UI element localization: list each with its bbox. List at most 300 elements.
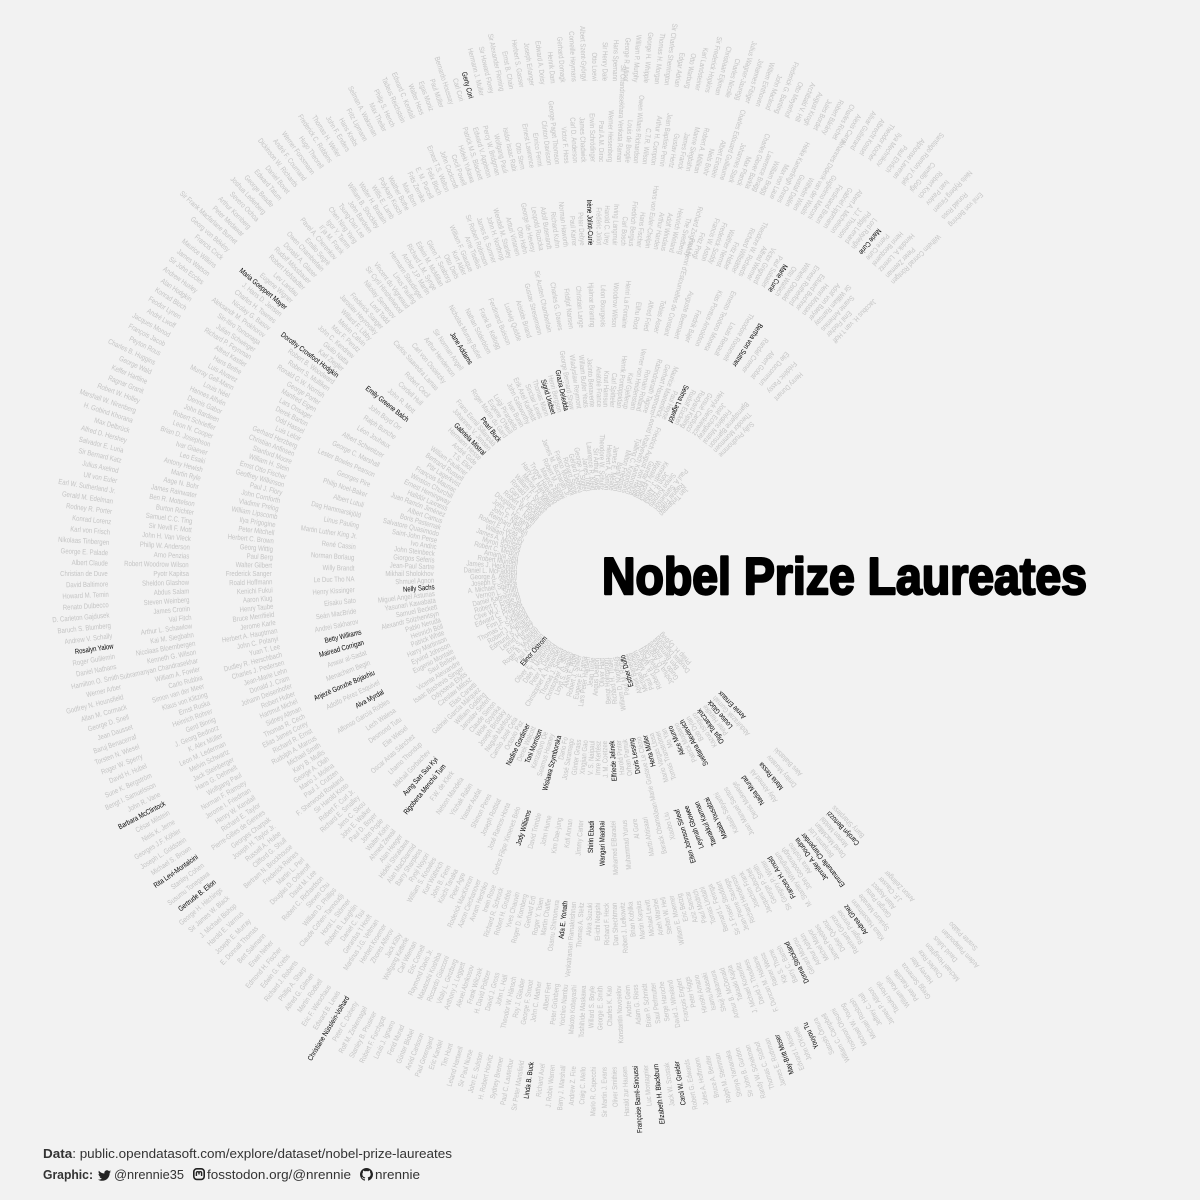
highlighted name: Françoise Barré-Sinoussi: Françoise Barré-Sinoussi: [631, 1066, 644, 1133]
ring: peace laureates: Martti Ahtisaari: [640, 816, 656, 857]
ring: peace laureates: Randal Cremer: [740, 336, 770, 375]
ring: physiology or medicine laureates: Edgar Adrian: [673, 52, 687, 88]
ring: chemistry laureates: William E. Moerner: [666, 895, 686, 946]
ring: physiology or medicine laureates: Barry J. Marshall: [555, 1065, 567, 1111]
ring: literature laureates: Bjørnstjerne Bjørnson: [706, 400, 751, 450]
ring: peace laureates: Carlos Filipe Ximenes Belo: [490, 805, 523, 876]
ring: physics laureates: Niels Bohr: [701, 148, 717, 177]
ring: physics laureates: Robert B. Laughlin: [322, 902, 359, 947]
ring: physiology or medicine laureates: Willem Einthoven: [753, 61, 777, 108]
ring: physiology or medicine laureates: Karl von Frisch: [70, 524, 110, 537]
ring: physiology or medicine laureates: Konrad Bloch: [153, 285, 188, 312]
highlighted name: Elizabeth H. Blackburn: Elizabeth H. Blackburn: [651, 1063, 667, 1125]
ring: physiology or medicine laureates: Sir Peter Mansfield: [509, 1060, 526, 1111]
ring: chemistry laureates: Walther Nernst: [714, 228, 737, 268]
ring: peace laureates: Frédéric Passy: [765, 360, 799, 395]
ring: physiology or medicine laureates: Bernardo Houssay: [432, 56, 456, 106]
ring: chemistry laureates: Alan Heeger: [377, 832, 404, 864]
ring: physics laureates: Percy W. Bridgman: [480, 124, 502, 176]
ring: chemistry laureates: Geoffrey Wilkinson: [235, 467, 286, 489]
ring: chemistry laureates: Norman Haworth: [557, 201, 571, 247]
ring: literature laureates: Harry Martinson: [406, 634, 449, 659]
ring: physics laureates: Henri Becquerel: [870, 230, 905, 268]
highlighted name: Tawakkul Karman: Tawakkul Karman: [692, 800, 718, 847]
ring: peace laureates: Auguste Beernaert: [672, 290, 696, 340]
ring: physiology or medicine laureates: Theodor Kocher: [866, 122, 897, 163]
ring: economics laureates: Robert E. Lucas Jr.: [477, 512, 527, 542]
ring: economics laureates: Angus Deaton: [591, 658, 601, 696]
highlighted name: Nadine Gordimer: Nadine Gordimer: [504, 722, 532, 767]
ring: physiology or medicine laureates: Alan Hodgkin: [159, 276, 194, 303]
ring: literature laureates: Vicente Aleixandre: [415, 658, 462, 692]
ring: physiology or medicine laureates: Hugo Theorell: [297, 134, 325, 170]
ring: physics laureates: Heike Kamerlingh Onnes: [775, 140, 812, 204]
ring: physiology or medicine laureates: Oliver Smithies: [610, 1067, 620, 1107]
ring: economics laureates: Robert W. Fogel: [501, 488, 540, 523]
ring: physiology or medicine laureates: Bert Sakmann: [235, 931, 268, 965]
ring: physics laureates: Pierre Curie: [864, 232, 891, 262]
ring: peace laureates: Kailash Satyarthi: [711, 791, 740, 835]
ring: physiology or medicine laureates: Robert W. Holley: [96, 381, 141, 405]
ring: physics laureates: Philip W. Anderson: [139, 540, 190, 552]
ring: literature laureates: Henri Bergson: [546, 374, 564, 413]
ring: physiology or medicine laureates: Paul Ehrlich: [883, 144, 909, 175]
ring: physics laureates: Brian D. Josephson: [159, 424, 211, 449]
ring: physiology or medicine laureates: Baruj Benacerraf: [92, 732, 137, 755]
ring: physiology or medicine laureates: André F. Cournand: [271, 137, 309, 183]
ring: chemistry laureates: Sir J. Fraser Stoddart: [713, 880, 742, 936]
ring: physiology or medicine laureates: Daniel Bovet: [264, 164, 292, 195]
ring: physics laureates: Eric Cornell: [405, 944, 427, 975]
ring: literature laureates: Tomas Tranströmer: [653, 730, 679, 781]
ring: physiology or medicine laureates: Günter Blobel: [394, 1028, 416, 1065]
ring: chemistry laureates: Kurt Wüthrich: [420, 860, 446, 896]
ring: chemistry laureates: Kenichi Fukui: [236, 585, 273, 596]
ring: physiology or medicine laureates: Tim Hunt: [439, 1042, 455, 1068]
ring: chemistry laureates: John H. Northrop: [484, 215, 507, 261]
ring: physiology or medicine laureates: Thomas H. Weller: [310, 113, 343, 159]
ring: literature laureates: John Steinbeck: [394, 544, 436, 558]
ring: physiology or medicine laureates: David H. Hubel: [108, 761, 148, 785]
ring: literature laureates: Harold Pinter: [614, 740, 626, 775]
ring: physics laureates: [119, 65, 943, 1044]
ring: physics laureates: Rainer Weiss: [758, 951, 780, 988]
ring: physics laureates: Masatoshi Koshiba: [415, 951, 443, 1001]
ring: literature laureates: José Echegaray: [696, 401, 728, 442]
ring: economics laureates: Bertil Ohlin: [611, 462, 624, 492]
ring: literature laureates: Henryk Sienkiewicz: [690, 389, 726, 438]
ring: physics laureates: Martinus J.G. Veltman: [341, 917, 381, 972]
ring: chemistry laureates: Johann Deisenhofer: [240, 681, 293, 708]
ring: peace laureates: Arthur Henderson: [422, 335, 457, 378]
ring: physics laureates: Val Fitch: [168, 613, 192, 624]
ring: physiology or medicine laureates: Arthur Kornberg: [217, 194, 253, 231]
ring: chemistry laureates: Aziz Sancar: [682, 890, 699, 924]
ring: peace laureates: Georges Pire: [336, 468, 372, 489]
highlighted name: Leymah Gbowee: Leymah Gbowee: [682, 804, 706, 850]
ring: chemistry laureates: Frédéric Joliot: [594, 207, 603, 245]
ring: peace laureates: Sir Austen Chamberlain: [533, 270, 555, 333]
ring: chemistry laureates: Morten Meldal: [818, 815, 850, 849]
ring: chemistry laureates: Willard F. Libby: [339, 307, 374, 342]
ring: peace laureates: Woodrow Wilson: [609, 282, 621, 328]
ring: physics laureates: Anton Zeilinger: [882, 869, 917, 904]
ring: economics laureates: Douglas Diamond: [654, 634, 692, 675]
ring: chemistry laureates: Joachim Frank: [736, 870, 761, 910]
ring: physiology or medicine laureates: Roger W. Sperry: [100, 752, 144, 776]
ring: physiology or medicine laureates: Sir Martin J. Evans: [600, 1067, 609, 1117]
ring: peace laureates: John Boyd Orr: [367, 402, 404, 432]
ring: chemistry laureates: Charles J. Pedersen: [231, 658, 285, 681]
ring: economics laureates: William Vickrey: [484, 522, 525, 546]
highlighted name: Donna Strickland: Donna Strickland: [782, 940, 811, 985]
ring: chemistry laureates: John Goodenough: [779, 846, 814, 892]
ring: physics laureates: Horst L. Störmer: [318, 897, 352, 937]
ring: physiology or medicine laureates: Gerhard Domagk: [555, 36, 568, 83]
ring: literature laureates: Erik Axel Karlfeldt: [512, 376, 539, 423]
ring: chemistry laureates: Rudolph A. Marcus: [269, 733, 318, 766]
ring: economics laureates: [463, 414, 693, 712]
ring: physics laureates: Melvin Schwartz: [188, 747, 231, 774]
ring: peace laureates: Christian Lange: [574, 286, 586, 328]
ring: physiology or medicine laureates: Robert Koch: [916, 169, 944, 201]
highlighted name: Wislawa Szymborska: Wislawa Szymborska: [540, 734, 563, 792]
ring: physics laureates: Yoichiro Nambu: [557, 984, 570, 1027]
ring: physics laureates: Norman F. Ramsey: [199, 778, 248, 812]
ring: physiology or medicine laureates: Otto Loewi: [590, 52, 599, 81]
ring: physics laureates: James Rainwater: [150, 482, 197, 500]
ring: economics laureates: George A. Akerlof: [470, 571, 517, 581]
ring: economics laureates: Harry M. Markowitz: [520, 460, 557, 508]
ring: physiology or medicine laureates: Joseph L. Goldstein: [138, 835, 188, 871]
ring: economics laureates: Alvin E. Roth: [561, 653, 580, 688]
ring: chemistry laureates: George A. Olah: [292, 754, 331, 785]
ring: physics laureates: Sheldon Glashow: [142, 578, 189, 588]
highlighted name: Anjezë Gonxhe Bojaxhiu: Anjezë Gonxhe Bojaxhiu: [312, 668, 376, 702]
ring: peace laureates: Henry Dunant: [773, 370, 805, 403]
highlighted name: Pearl Buck: Pearl Buck: [479, 415, 504, 444]
ring: physiology or medicine laureates: Fritz Lipmann: [345, 107, 370, 143]
ring: physiology or medicine laureates: Albert Claude: [72, 558, 108, 568]
ring: chemistry laureates: Bruce Merrifield: [232, 610, 275, 624]
ring: physics laureates: Willis E. Lamb: [370, 183, 397, 221]
ring: chemistry laureates: Roderick MacKinnon: [445, 874, 475, 929]
ring: chemistry laureates: Jerome Karle: [240, 618, 276, 632]
ring: chemistry laureates: Elias James Corey: [261, 719, 310, 750]
ring: peace laureates: Abiy Ahmed Ali: [748, 767, 779, 804]
ring: economics laureates: Gary S. Becker: [507, 485, 543, 520]
ring: chemistry laureates: Svante Arrhenius: [819, 294, 856, 333]
ring: physics laureates: Jack Kilby: [383, 931, 404, 959]
ring: physiology or medicine laureates: Michael Rosbash: [847, 997, 878, 1041]
ring: chemistry laureates: Jean-Pierre Sauvage: [721, 877, 751, 932]
ring: physics laureates: J.J. Thomson: [836, 206, 864, 241]
ring: physiology or medicine laureates: Robert F. Furchgott: [357, 1014, 388, 1064]
ring: physiology or medicine laureates: J. Robin Warren: [544, 1064, 557, 1108]
ring: chemistry laureates: Benjamin List: [806, 826, 835, 859]
ring: physics laureates: Georges Charpak: [229, 815, 272, 850]
ring: physiology or medicine laureates: Max Theiler: [367, 101, 388, 133]
ring: physiology or medicine laureates: Ronald Ross: [939, 191, 970, 222]
ring: economics laureates: James M. Buchanan Jr.: [539, 437, 572, 498]
ring: chemistry laureates: M. Stanley Whittingham: [772, 850, 813, 908]
ring: chemistry laureates: Richard Zsigmondy: [683, 206, 705, 258]
ring: physiology or medicine laureates: Julius Axelrod: [82, 458, 120, 475]
ring: literature laureates: Bob Dylan: [683, 715, 705, 743]
ring: literature laureates: T.S. Eliot: [450, 450, 474, 472]
ring: peace laureates: [300, 237, 805, 876]
ring: physiology or medicine laureates: Edward A. Doisy: [533, 40, 547, 85]
ring: physics laureates: J. Michael Kosterlitz: [734, 961, 760, 1014]
ring: physiology or medicine laureates: Niels K. Jerne: [140, 817, 177, 844]
ring: chemistry laureates: Manfred Eigen: [280, 387, 318, 414]
ring: physiology or medicine laureates: Ilya Mechnikov: [874, 131, 904, 169]
ring: chemistry laureates: Glenn T. Seaborg: [424, 239, 454, 284]
ring: physics laureates: Samuel C.C. Ting: [145, 511, 193, 526]
ring: economics laureates: Milton Friedman: [615, 449, 633, 493]
ring: literature laureates: Roger Martin du Gard: [468, 387, 509, 440]
ring: physiology or medicine laureates: Jack W. Szostak: [662, 1062, 676, 1107]
ring: peace laureates: Eisaku Sato: [323, 596, 356, 608]
ring: physics laureates: Frits Zernike: [405, 170, 428, 204]
ring: literature laureates: Joseph Brodsky: [476, 708, 508, 748]
ring: physiology or medicine laureates: Mario R. Capecchi: [588, 1067, 598, 1116]
ring: economics laureates: Bengt Holmström: [601, 658, 613, 704]
ring: literature laureates: Heinrich Böll: [409, 622, 444, 641]
ring: physiology or medicine laureates: Susumu Tonegawa: [166, 869, 212, 907]
ring: physics laureates: Robert Hofstadter: [267, 253, 307, 292]
ring: physiology or medicine laureates: Sir Alexander Fleming: [486, 33, 506, 92]
ring: literature laureates: Halldór Laxness: [406, 488, 449, 513]
ring: peace laureates: F.W. de Klerk: [428, 769, 456, 803]
ring: literature laureates: Verner von Heidenstam: [628, 348, 648, 411]
ring: peace laureates: Ralph Bunche: [361, 413, 398, 441]
ring: chemistry laureates: Roald Hoffmann: [229, 577, 272, 587]
ring: peace laureates: Fredrik Bajer: [683, 309, 703, 344]
ring: physiology or medicine laureates: Sir John B. Gurdon: [733, 1047, 755, 1098]
ring: physiology or medicine laureates: Tasuku Honjo: [874, 980, 902, 1015]
ring: chemistry laureates: Leopold Ruzicka: [530, 206, 546, 251]
ring: economics laureates: Lloyd S. Shapley: [552, 651, 576, 696]
ring: peace laureates: Muhammad Yunus: [619, 820, 633, 870]
ring: physiology or medicine laureates: Luc Montagnier: [641, 1065, 654, 1107]
ring: physics laureates: Roger Penrose: [835, 908, 865, 946]
ring: physics laureates: Gustaf Dalén: [783, 173, 807, 208]
ring: physiology or medicine laureates: Sir Paul Nurse: [456, 1048, 475, 1088]
ring: physics laureates: William D. Phillips: [301, 886, 338, 928]
ring: chemistry laureates: Robert B. Woodward: [286, 347, 336, 386]
ring: literature laureates: Orhan Pamuk: [620, 739, 635, 776]
icon: github: [360, 1168, 373, 1181]
ring: economics laureates: Lars Peter Hansen: [576, 656, 593, 707]
ring: physics laureates: Kip S. Thorne: [766, 948, 789, 985]
ring: physics laureates: Abdus Salam: [154, 586, 190, 597]
ring: physiology or medicine laureates: Charles Rice: [915, 948, 944, 980]
highlighted name: Wangari Maathai: Wangari Maathai: [598, 821, 607, 866]
ring: economics laureates: Richard Stone: [561, 456, 581, 495]
ring: physiology or medicine laureates: Salvador E. Luria: [78, 435, 125, 455]
ring: physiology or medicine laureates: Hans Krebs: [337, 116, 361, 148]
ring: chemistry laureates: Artturi Virtanen: [504, 216, 522, 257]
ring: physiology or medicine laureates: Stanley B. Prusiner: [347, 1010, 378, 1059]
ring: literature laureates: Naguib Mahfouz: [483, 712, 514, 753]
ring: physics laureates: Wolfgang Ketterle: [381, 936, 411, 982]
ring: literature laureates: Abdulrazak Gurnah: [711, 694, 752, 738]
ring: chemistry laureates: Kary B. Mullis: [291, 747, 326, 775]
ring: physics laureates: Ivar Giaever: [175, 439, 209, 457]
ring: chemistry laureates: Nikolay Semenov: [362, 278, 399, 320]
ring: chemistry laureates: Paul D. Boyer: [347, 811, 379, 844]
ring: physics laureates: Konstantin Novoselov: [613, 985, 625, 1044]
ring: physics laureates: Felix Bloch: [424, 166, 444, 197]
highlighted name: Selma Lagerlöf: Selma Lagerlöf: [666, 384, 691, 424]
ring: chemistry laureates: Henry Taube: [239, 602, 274, 614]
highlighted name: Alice Munro: Alice Munro: [665, 724, 687, 757]
ring: literature laureates: Czeslaw Milosz: [436, 675, 474, 708]
ring: literature laureates: William Faulkner: [429, 444, 470, 478]
ring: physics laureates: Leon N. Cooper: [171, 418, 214, 441]
ring: literature laureates: Winston Churchill: [410, 471, 455, 501]
ring: literature laureates: Odysseus Elytis: [430, 670, 469, 702]
ring: physics laureates: Owen Chamberlain: [285, 229, 326, 273]
ring: physics laureates: Sin-Itiro Tomonaga: [216, 311, 262, 347]
ring: literature laureates: Rudolf Eucken: [672, 388, 698, 427]
ring: chemistry laureates: Friedrich Bergius: [627, 201, 640, 247]
ring: physics laureates: Wilhelm Conrad Röntgen: [889, 233, 943, 286]
ring: literature laureates: Anatole France: [594, 366, 604, 407]
ring: chemistry laureates: Vladimir Prelog: [238, 496, 279, 513]
ring: literature laureates: Karl Gjellerup: [621, 372, 636, 410]
ring: physics laureates: Walther Bothe: [387, 174, 412, 212]
ring: physics laureates: Alain Aspect: [869, 881, 898, 911]
ring: physics laureates: Frederick Reines: [261, 849, 300, 886]
ring: physiology or medicine laureates: William P. Murphy: [632, 35, 644, 83]
ring: physics laureates: François Englert: [674, 978, 691, 1022]
ring: physics laureates: Hiroshi Amano: [691, 974, 709, 1014]
highlighted name: Andrea Ghez: Andrea Ghez: [842, 903, 870, 937]
ring: physics laureates: Wolfgang Pauli: [492, 133, 511, 174]
ring: chemistry laureates: John C. Polanyi: [236, 634, 279, 651]
ring: peace laureates: Sir Norman Angell: [431, 327, 466, 372]
ring: chemistry laureates: Yves Chauvin: [504, 891, 522, 929]
ring: physiology or medicine laureates: Jeffrey C. Hall: [856, 991, 884, 1028]
ring: physiology or medicine laureates: Rolf M. Zinkernagel: [336, 1005, 369, 1055]
ring: economics laureates: Amartya Sen: [484, 548, 519, 563]
ring: chemistry laureates: Hideki Shirakawa: [376, 837, 411, 880]
ring: physiology or medicine laureates: Joseph E. Murray: [213, 917, 253, 956]
ring: physics laureates: James Franck: [675, 132, 691, 170]
ring: physics laureates: Dennis Gabor: [187, 393, 224, 416]
ring: physics laureates: Tsung-Dao Lee: [336, 202, 367, 240]
ring: physiology or medicine laureates: Nikolaas Tinbergen: [58, 535, 109, 547]
ring: physiology or medicine laureates: Sune K. Bergström: [103, 771, 153, 800]
ring: physics laureates: Steven Chu: [304, 880, 332, 909]
ring: physiology or medicine laureates: Emil von Behring: [947, 191, 985, 229]
ring: physiology or medicine laureates: James P. Allison: [865, 985, 896, 1027]
ring: physics laureates: Charles K. Kao: [605, 986, 615, 1026]
ring: physiology or medicine laureates: Edward C. Kendall: [390, 71, 417, 120]
ring: chemistry laureates: Gerhard Ertl: [522, 895, 537, 929]
ring: physiology or medicine laureates: Earl W. Sutherland Jr.: [57, 477, 116, 495]
ring: economics laureates: Ragnar Frisch: [654, 481, 686, 515]
ring: economics laureates: Eugene F. Fama: [571, 655, 588, 700]
ring: physiology or medicine laureates: Ivan Pavlov: [924, 178, 951, 207]
ring: chemistry laureates: Arthur Harden: [651, 212, 666, 250]
ring: physiology or medicine laureates: Selman A. Waksman: [346, 85, 379, 138]
ring: physiology or medicine laureates: Bengt I. Samuelsson: [103, 780, 157, 812]
ring: peace laureates: Léon Bourgeois: [599, 285, 608, 327]
ring: physiology or medicine laureates: Edvard I. Moser: [782, 1029, 806, 1072]
ring: chemistry laureates: Robert J. Lefkowitz: [618, 902, 630, 953]
ring: chemistry laureates: Dan Shechtman: [610, 903, 620, 946]
ring: physiology or medicine laureates: Andrew Huxley: [162, 264, 200, 295]
ring: physiology or medicine laureates: Rodney R. Porter: [66, 501, 113, 516]
highlighted name: Jane Addams: Jane Addams: [448, 331, 475, 366]
ring: economics laureates: Roger B. Myerson: [501, 628, 542, 667]
ring: peace laureates: Al Gore: [630, 818, 641, 839]
ring: literature laureates: Rabindranath Tagore: [641, 358, 664, 414]
ring: peace laureates: Charles G. Dawes: [548, 282, 565, 331]
ring: literature laureates: Elias Canetti: [447, 680, 478, 709]
ring: chemistry laureates: Akira Yoshino: [786, 841, 814, 876]
ring: physics laureates: John Cockcroft: [438, 149, 460, 190]
ring: chemistry laureates: Otto Wallach: [773, 265, 799, 298]
ring: literature laureates: Patrick White: [410, 628, 446, 649]
ring: peace laureates: Louis Renault: [712, 321, 737, 358]
ring: peace laureates: Le Duc Tho NA: [313, 574, 354, 584]
ring: physiology or medicine laureates: Julius Wagner-Jauregg: [734, 40, 759, 102]
ring: economics laureates: Vernon L. Smith: [476, 584, 519, 601]
ring: economics laureates: Theodore W. Schultz: [598, 434, 607, 490]
ring: economics laureates: Robert C. Merton: [474, 539, 520, 558]
ring: physics laureates: Michel Mayor: [805, 927, 831, 963]
ring: chemistry laureates: Ernst Otto Fischer: [239, 459, 288, 481]
ring: physiology or medicine laureates: César Milstein: [134, 808, 171, 834]
ring: physiology or medicine laureates: Carl Cori: [451, 77, 466, 102]
highlighted name: Irène Joliot-Curie: Irène Joliot-Curie: [585, 199, 595, 245]
ring: economics laureates: Paul A. Samuelson: [651, 467, 690, 512]
ring: literature laureates: Frédéric Mistral: [701, 408, 734, 446]
ring: chemistry laureates: Akira Suzuki: [584, 903, 594, 936]
ring: peace laureates: Andrei Sakharov: [314, 617, 359, 634]
ring: chemistry laureates: Ernest Rutherford: [787, 264, 821, 308]
ring: physiology or medicine laureates: Frederick C. Robbins: [296, 112, 334, 164]
ring: economics laureates: Paul Krugman: [513, 631, 546, 664]
ring: physics laureates: Robert Schrieffer: [172, 408, 217, 432]
ring: physiology or medicine laureates: Craig C. Mello: [577, 1067, 588, 1105]
ring: economics laureates: Daniel Kahneman: [472, 589, 520, 608]
ring: physics laureates: Gabriel Lippmann: [821, 186, 854, 231]
ring: peace laureates: Kim Dae-jung: [549, 817, 564, 854]
ring: physics laureates: Jack Steinberger: [191, 755, 235, 783]
ring: peace laureates: Carlos Saavedra Lamas: [391, 338, 440, 392]
highlighted name: Marie Curie (chemistry): Marie Curie: [766, 263, 790, 294]
ring: economics laureates: Wassily Leontief: [636, 459, 664, 502]
highlighted name: Jody Williams: Jody Williams: [514, 809, 533, 846]
ring: physiology or medicine laureates: Hamilton O. Smith: [70, 672, 120, 691]
ring: literature laureates: Mo Yan: [659, 727, 675, 749]
ring: peace laureates: Kofi Annan: [562, 819, 575, 848]
ring: physics laureates: Albert A. Michelson: [828, 188, 865, 235]
ring: economics laureates: Peter A. Diamond: [527, 642, 560, 687]
ring: chemistry laureates: John E. Walker: [338, 805, 373, 840]
ring: peace laureates: Yitzhak Rabin: [447, 781, 474, 817]
ring: chemistry laureates: Sidney Altman: [264, 704, 302, 728]
ring: peace laureates: Frank B. Kellogg: [477, 307, 504, 351]
ring: physics laureates: J.F. Clauser: [876, 875, 904, 904]
ring: literature laureates: Sinclair Lewis: [523, 383, 545, 420]
ring: literature laureates: Seamus Heaney: [535, 732, 557, 777]
